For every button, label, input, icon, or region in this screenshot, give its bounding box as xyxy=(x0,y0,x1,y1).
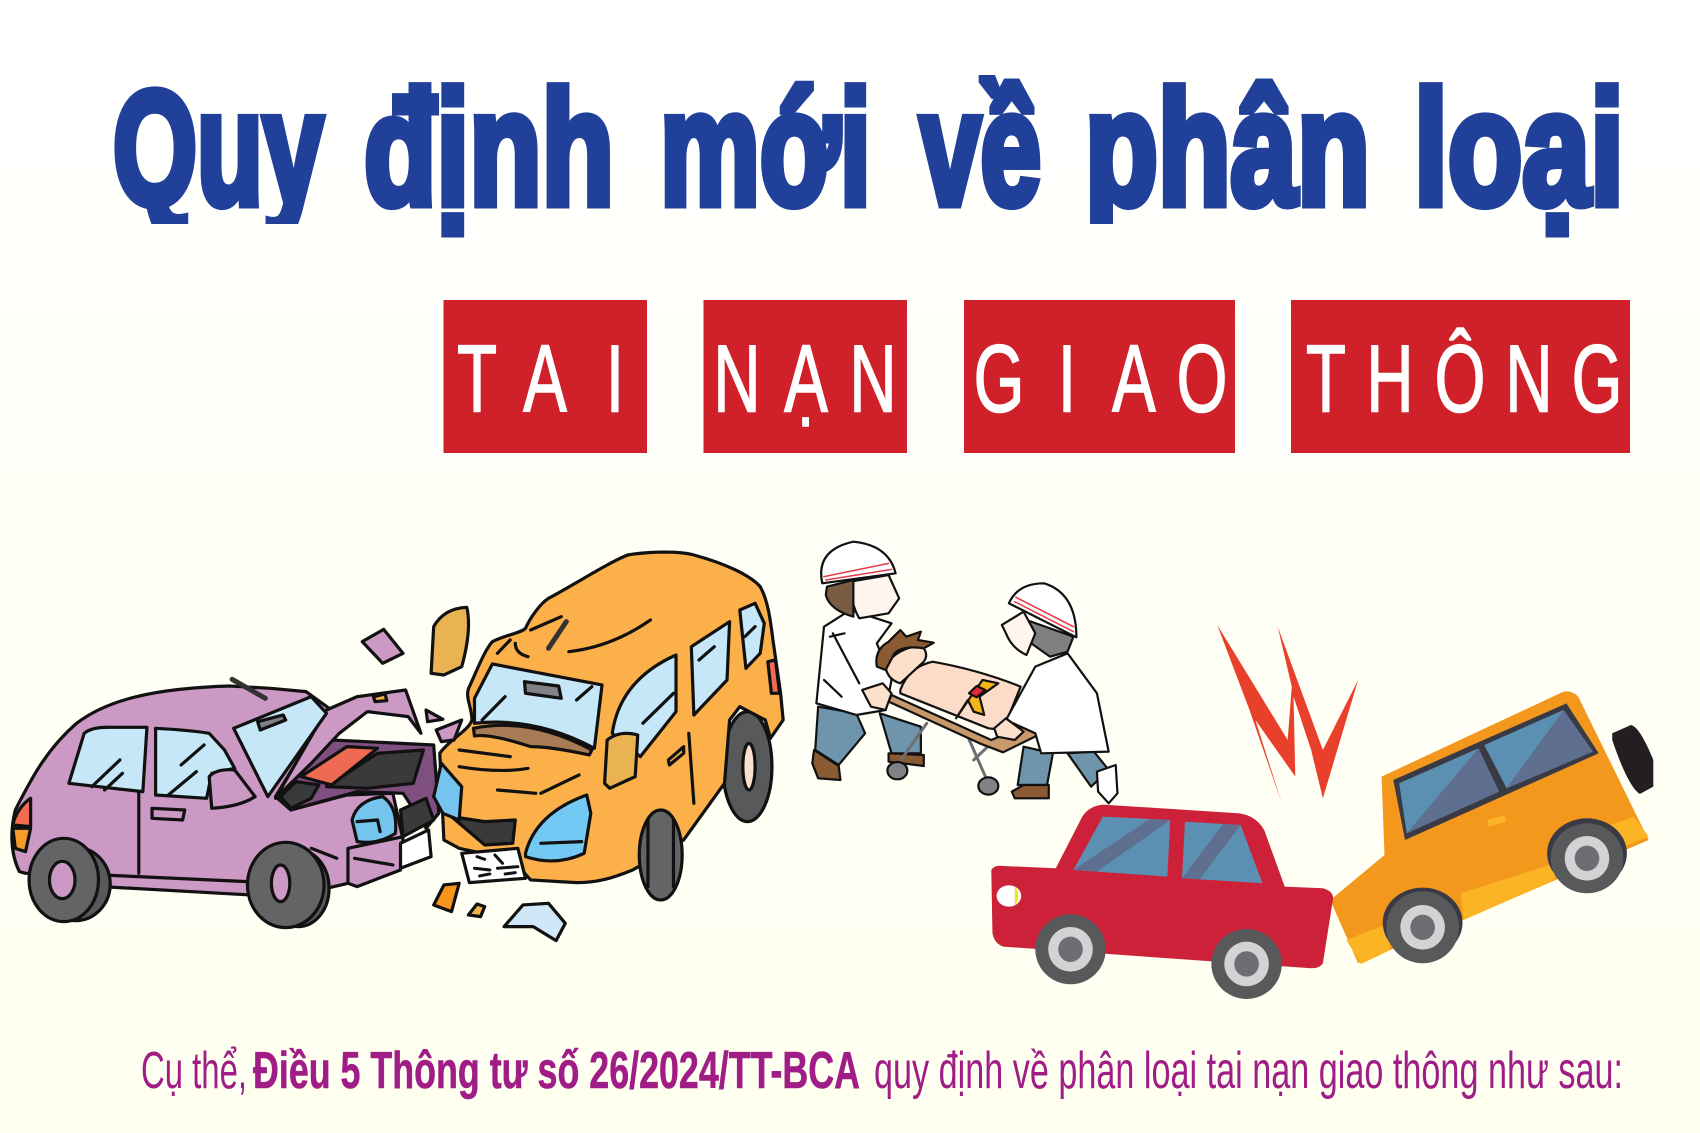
left paramedic xyxy=(812,542,924,780)
word box: GIAO: GIAO xyxy=(974,326,1227,433)
word box: GIAO xyxy=(964,300,1235,453)
yellow van xyxy=(431,552,783,900)
title: Quy xyxy=(113,58,323,239)
word box: NẠN xyxy=(704,300,907,453)
intro sentence xyxy=(141,1042,1623,1100)
illustration: paramedics carrying a patient on a stretcher xyxy=(812,542,1117,803)
impact spark xyxy=(1217,625,1358,803)
flying debris xyxy=(362,629,565,941)
title: định xyxy=(364,58,614,239)
red word banner: TAI NẠN GIAO THÔNG xyxy=(444,300,1630,453)
right paramedic xyxy=(994,583,1117,803)
word box: THÔNG xyxy=(1291,300,1630,453)
purple car xyxy=(12,679,439,928)
word box: THÔNG: THÔNG xyxy=(1306,326,1622,433)
illustration: red car rear-ended by orange SUV xyxy=(991,625,1653,999)
word box: TAI: TAI xyxy=(457,326,624,433)
illustration: head-on collision of purple car and yellow van xyxy=(12,552,783,941)
patient xyxy=(862,630,1021,730)
title: loại xyxy=(1414,58,1624,239)
orange SUV xyxy=(1331,691,1653,964)
title xyxy=(114,75,1619,238)
red car xyxy=(991,805,1333,999)
intro sentence: Cụ thể, xyxy=(141,1042,247,1100)
word box: TAI xyxy=(444,300,647,453)
title: về xyxy=(920,58,1041,239)
title: mới xyxy=(660,58,871,239)
stretcher xyxy=(887,695,1038,795)
word box: NẠN: NẠN xyxy=(713,326,897,433)
intro sentence: Điều 5 Thông tư số 26/2024/TT-BCA xyxy=(253,1042,860,1100)
title: phân xyxy=(1085,58,1370,239)
